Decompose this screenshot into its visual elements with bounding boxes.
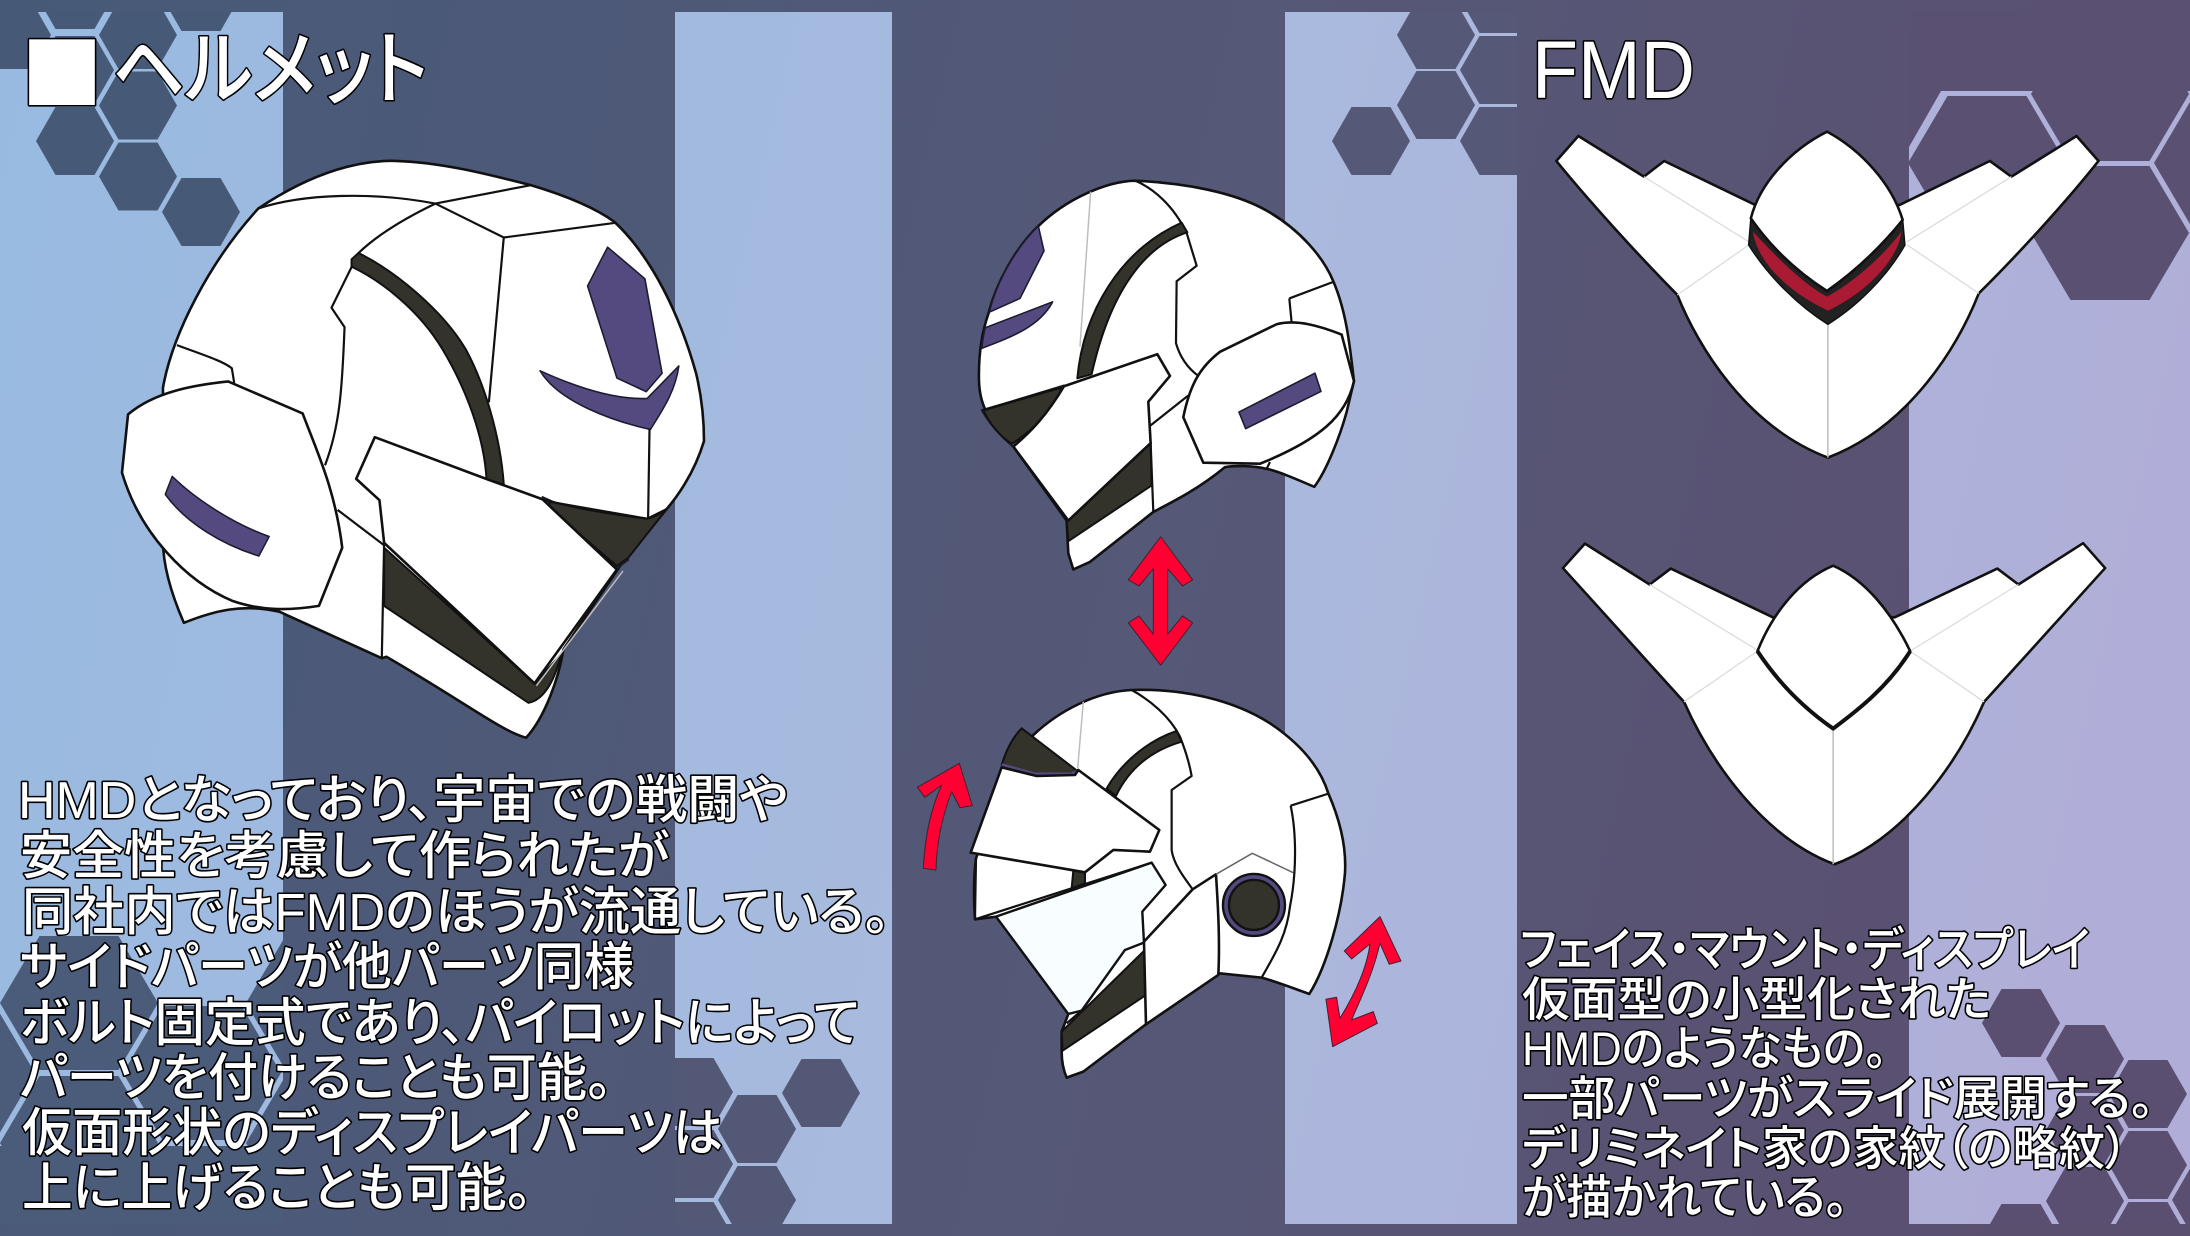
hexagon pattern: top left	[0, 0, 240, 246]
raised upper mask	[971, 767, 1159, 872]
side pod	[1183, 322, 1354, 464]
FMD: top mask with red crest	[1556, 132, 2099, 458]
text block: FMD description: HMDのようなもの。	[1522, 1022, 1887, 1075]
raised dark visor	[1002, 728, 1078, 776]
title: helmet: ■	[21, 8, 103, 127]
dark connector	[1072, 871, 1085, 888]
red crest	[1753, 232, 1901, 311]
text block: FMD description	[1520, 923, 2154, 1224]
arrow: curved double	[1326, 917, 1401, 1047]
helmet: side view with raised visor	[971, 690, 1345, 1078]
arrow: curved up	[917, 763, 972, 870]
purple pod strip	[165, 476, 269, 556]
text block: helmet description: 上に上げることも可能。	[22, 1160, 532, 1218]
lower dark band	[1067, 443, 1152, 541]
dark visor	[542, 497, 629, 570]
title: helmet	[21, 8, 428, 127]
text block: helmet description: 仮面形状のディスプレイパーツは	[22, 1105, 723, 1163]
arrow: vertical double	[1128, 537, 1193, 665]
text block: helmet description: ボルト固定式であり、パイロットによって	[20, 995, 860, 1053]
dark arc band	[1077, 223, 1187, 378]
lower dark band	[1062, 950, 1146, 1051]
purple chevron	[982, 302, 1053, 348]
purple pod strip	[1239, 373, 1321, 429]
hexagon pattern: bottom right	[1982, 989, 2190, 1236]
text block: FMD description: 一部パーツがスライド展開する。	[1522, 1072, 2154, 1125]
text block: helmet description	[18, 772, 890, 1218]
text block: FMD description: が描かれている。	[1522, 1171, 1848, 1224]
text block: helmet description: HMDとなっており、宇宙での戦闘や	[18, 772, 788, 830]
helmet: large three-quarter view	[122, 161, 704, 738]
dark arc band	[352, 253, 504, 485]
FMD: closed mask	[1563, 543, 2105, 864]
hexagon pattern: top centre right	[1332, 12, 1517, 175]
text block: helmet description: パーツを付けることも可能。	[20, 1050, 612, 1108]
bolt socket	[1223, 874, 1285, 936]
text block: helmet description: サイドパーツが他パーツ同様	[20, 939, 634, 997]
side pod	[122, 381, 342, 609]
hexagon pattern: bottom left	[0, 936, 283, 1224]
text block: FMD description: デリミネイト家の家紋（の略紋）	[1522, 1122, 2128, 1175]
lower clear visor	[996, 863, 1166, 1014]
title: helmet: ヘルメット	[112, 25, 428, 114]
lens plate	[1757, 566, 1910, 729]
hexagon pattern: top right	[1908, 0, 2190, 300]
text block: FMD description: フェイス・マウント・ディスプレイ	[1520, 923, 2090, 976]
purple crest	[989, 226, 1044, 312]
lower dark band	[384, 548, 561, 703]
dark chevron	[1749, 218, 1905, 324]
text block: FMD description: 仮面型の小型化された	[1522, 973, 1991, 1026]
dark visor	[982, 385, 1065, 447]
title: FMD: FMD	[1532, 25, 1695, 116]
purple chevron	[540, 366, 679, 429]
helmet: side view closed	[979, 181, 1354, 569]
purple crest	[588, 247, 662, 392]
dark arc band	[1107, 731, 1182, 796]
mask plate	[1013, 354, 1170, 521]
front cheek panel	[1144, 874, 1219, 1024]
lens plate	[1751, 132, 1903, 291]
text block: helmet description: 同社内ではFMDのほうが流通している。	[22, 884, 890, 942]
hexagon pattern: bottom centre	[675, 1058, 860, 1224]
mask plate	[356, 437, 617, 683]
text block: helmet description: 安全性を考慮して作られたが	[20, 828, 669, 886]
